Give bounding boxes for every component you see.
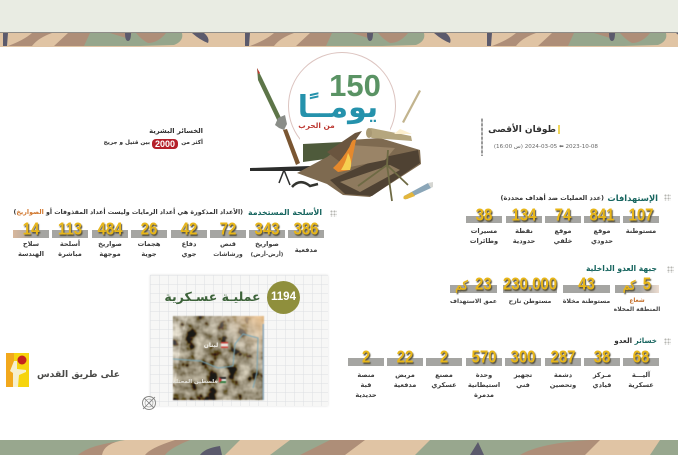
word: days: يومــًا xyxy=(298,90,378,125)
stat 386 xyxy=(288,220,324,254)
stat 484: موجهة xyxy=(99,250,121,258)
stat 343: 343 xyxy=(254,220,280,239)
red pill 2000: 2000 xyxy=(155,139,175,149)
stat 42: دفاع xyxy=(182,240,196,248)
stat 287 xyxy=(545,348,581,389)
tank xyxy=(297,131,421,197)
stat 300: تجهيز xyxy=(514,371,532,379)
stat 68: آليـــة xyxy=(632,371,650,379)
stat 26 xyxy=(131,220,167,258)
stat 43: 43 xyxy=(578,275,595,294)
stat 2 platforms: قبة xyxy=(360,381,372,389)
stat 5 km: المنطقة المخلاة xyxy=(614,307,660,313)
stat 570: مدمرة xyxy=(474,391,494,399)
panel: targets xyxy=(466,193,671,245)
stat 300 xyxy=(505,348,541,389)
stat 300: 300 xyxy=(510,348,536,367)
stat 5 km: 5 كم xyxy=(623,275,651,294)
stat 26: 26 xyxy=(141,220,157,239)
stat 26: جوية xyxy=(141,250,157,258)
stat 38 xyxy=(584,348,620,389)
label: occupied Palestine: فلسطين المحتلة xyxy=(173,379,218,385)
stat 287: دشمة xyxy=(554,371,572,379)
stat 230,000: 230.000 xyxy=(503,275,557,294)
stat 841 xyxy=(584,206,620,245)
stat 43: مستوطنة مخلاة xyxy=(563,298,610,305)
stat 287: 287 xyxy=(550,348,576,367)
stat 74: 74 xyxy=(555,206,571,225)
stat 841: 841 xyxy=(589,206,615,225)
stat 14: الهندسة xyxy=(18,250,44,258)
stat 23 km: عمق الاستهداف xyxy=(450,298,497,305)
stat 72: قنص xyxy=(220,240,236,248)
stat 22: مدفعية xyxy=(394,381,416,389)
stat 14: سلاح xyxy=(23,240,39,248)
small rocket xyxy=(402,90,421,123)
stat 343 xyxy=(249,220,285,258)
logo xyxy=(6,353,29,387)
stat 287: وتحصين xyxy=(550,381,576,389)
bottom camouflage strip xyxy=(0,440,678,455)
stat 230,000: مستوطن نازح xyxy=(509,298,551,305)
stat 72 xyxy=(210,220,246,258)
stat 23 km xyxy=(450,275,497,305)
stat 2 platforms: 2 xyxy=(362,348,370,367)
operations count circle xyxy=(267,281,300,314)
stat 386: مدفعية xyxy=(295,246,317,254)
dotted column xyxy=(481,118,483,156)
stat 14: 14 xyxy=(23,220,39,239)
heading: الخسائر البشرية xyxy=(149,127,203,135)
map xyxy=(172,315,265,401)
stat 2 factories: مصنع xyxy=(435,371,453,379)
main illustration: 150 days of war, weapons xyxy=(250,52,433,202)
stat 134: نقطة xyxy=(515,227,533,235)
dotted marker xyxy=(667,266,674,273)
stat 2 platforms xyxy=(348,348,384,399)
stat 26: هجمات xyxy=(138,240,160,248)
stat 113: مباشرة xyxy=(58,250,82,258)
stat 570: استيطانية xyxy=(468,381,500,389)
heading: الإستهدافات xyxy=(607,193,658,203)
yellow tick xyxy=(558,125,560,134)
stat 386: 386 xyxy=(293,220,319,239)
stat 570: وحدة xyxy=(476,371,492,379)
stat 74: خلفي xyxy=(554,237,572,245)
tripod xyxy=(358,150,408,201)
count line xyxy=(104,138,203,149)
stat 107 xyxy=(623,206,659,235)
top pale band xyxy=(0,0,678,32)
stat 484: 484 xyxy=(97,220,123,239)
stat 14 xyxy=(13,220,49,258)
heading: جبهة العدو الداخلية xyxy=(586,264,657,273)
stat 5 km xyxy=(614,275,660,313)
stat 38: وطائرات xyxy=(470,237,498,245)
slogan: on the road to Jerusalem: على طريق القدس xyxy=(37,369,120,380)
stat 38: 38 xyxy=(594,348,610,367)
stat 300: فني xyxy=(516,381,530,389)
machine gun xyxy=(250,166,318,187)
stat 42: 42 xyxy=(181,220,197,239)
rocket xyxy=(257,68,300,165)
stat 2 platforms: منصة xyxy=(357,371,375,379)
top camouflage strip xyxy=(0,32,678,47)
stat 343: صواريخ xyxy=(255,240,279,248)
word: of the war: من الحرب xyxy=(298,121,335,130)
ammo box xyxy=(303,142,348,162)
stat 72: ورشاشات xyxy=(213,251,243,258)
stat 2 factories xyxy=(426,348,462,389)
date range: 2023-10-08 ⬅ 2024-03-05 (س 16:00) xyxy=(494,144,598,150)
stat 74: موقع xyxy=(554,227,572,235)
shell xyxy=(403,182,433,199)
stat 230,000 xyxy=(503,275,558,305)
stat 38: مـركز xyxy=(593,371,611,379)
stat 107: مستوطنة xyxy=(626,227,656,235)
label: Lebanon: لبنان xyxy=(204,342,218,349)
human losses block xyxy=(104,127,203,149)
flag: Palestine xyxy=(219,377,226,383)
stat 570 xyxy=(466,348,502,399)
stat 570: 570 xyxy=(471,348,497,367)
subheading: (عدد العمليات ضد أهداف محددة) xyxy=(501,194,604,202)
title: طوفان الأقصى xyxy=(488,125,556,135)
stat 23 km: 23 كم xyxy=(455,275,492,294)
stat 2 factories: 2 xyxy=(440,348,448,367)
stat 484 xyxy=(92,220,128,258)
stat 343: (أرض-أرض) xyxy=(251,252,283,258)
stat 2 platforms: حديدية xyxy=(355,391,377,399)
stat 38: 38 xyxy=(476,206,492,225)
icon: compass xyxy=(142,396,156,410)
heading: خسائر العدو xyxy=(614,336,657,345)
panel: enemy home front xyxy=(450,264,674,313)
stat 22: 22 xyxy=(397,348,413,367)
text: killed and wounded: بين قتيل و جريح xyxy=(104,140,150,146)
stat 841: موقع xyxy=(593,227,611,235)
stat 2 factories: عسكري xyxy=(431,381,457,389)
flag: Lebanon xyxy=(221,342,228,348)
stat 68: عسكرية xyxy=(628,381,654,389)
panel: weapons used xyxy=(13,208,337,258)
stat 38 xyxy=(466,206,502,245)
stat 38: قيادي xyxy=(593,381,611,389)
stat 113: 113 xyxy=(58,220,82,239)
heading: الأسلحة المستخدمة xyxy=(248,208,322,217)
stat 38: مسيرات xyxy=(471,227,497,235)
dotted marker xyxy=(664,338,671,345)
flames xyxy=(333,140,356,172)
title block xyxy=(481,118,598,156)
stat 841: حدودي xyxy=(591,237,613,245)
stat 107: 107 xyxy=(628,206,654,225)
number 150: 150 xyxy=(329,68,381,103)
stat 113 xyxy=(52,220,88,258)
stat 22 xyxy=(387,348,423,389)
panel: map sheet xyxy=(150,275,328,406)
launcher tube xyxy=(366,128,412,141)
stat 134: 134 xyxy=(511,206,537,225)
stat 43 xyxy=(563,275,610,305)
stat 134: حدودية xyxy=(513,237,535,245)
stat 484: صواريخ xyxy=(98,240,122,248)
stat 68 xyxy=(623,348,659,389)
heading: military operations: عمليـة عسـكرية xyxy=(164,289,261,304)
dotted marker xyxy=(330,210,337,217)
stat 42 xyxy=(171,220,207,258)
panel: enemy losses xyxy=(348,336,671,399)
operations count circle: 1194 xyxy=(271,291,296,303)
dotted marker xyxy=(664,194,671,201)
stat 113: أسلحة xyxy=(60,240,80,248)
subheading note: (الأعداد المذكورة هي أعداد الرمايات وليست أعداد المقذوفات أو الصواريخ) xyxy=(14,209,243,216)
stat 68: 68 xyxy=(633,348,649,367)
circle xyxy=(288,52,396,160)
stat 74 xyxy=(545,206,581,245)
stat 22: مربض xyxy=(395,371,415,379)
text: more than: أكثر من xyxy=(181,140,203,146)
stat 134 xyxy=(506,206,542,245)
stat 72: 72 xyxy=(220,220,236,239)
stat 5 km: شعاع xyxy=(629,298,645,304)
stat 42: جوي xyxy=(182,250,196,258)
